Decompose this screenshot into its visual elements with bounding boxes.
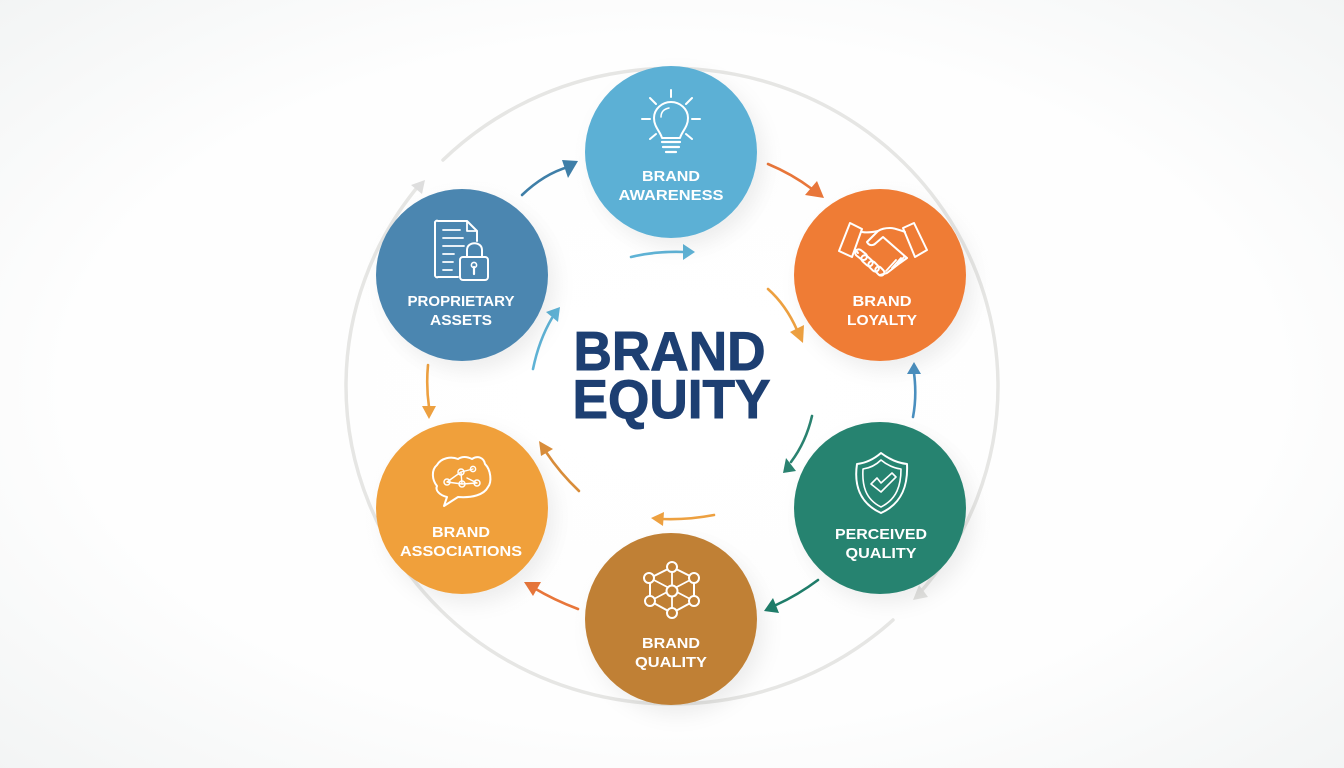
label: proprietary assets: [408, 293, 514, 329]
circle: brand quality: [585, 533, 757, 705]
arrowhead: upper ring arc: [913, 585, 928, 600]
label: brand loyalty: [847, 293, 917, 329]
outer ring: upper arc: [443, 68, 998, 600]
label: proprietary assets: ASSETS: [430, 312, 492, 329]
circle: perceived quality: [794, 422, 966, 594]
arrow: inner to perceived quality: [783, 416, 812, 473]
arrowhead: lower ring arc: [411, 180, 425, 194]
label: brand loyalty: LOYALTY: [847, 312, 917, 329]
circle: brand loyalty: [794, 189, 966, 361]
label: brand awareness: AWARENESS: [618, 187, 724, 204]
title: brand equity: [572, 320, 770, 430]
icon: document with padlock: [435, 221, 488, 280]
label: brand awareness: [618, 168, 724, 204]
label: brand quality: BRAND: [642, 635, 700, 652]
label: perceived quality: QUALITY: [846, 545, 916, 562]
title: brand equity: BRAND: [574, 320, 766, 382]
icon: light bulb: [642, 90, 700, 152]
arrow: proprietary assets to brand awareness: [522, 160, 578, 195]
arrow: perceived quality to brand loyalty: [907, 362, 921, 417]
arrow: inner to brand associations: [539, 441, 579, 491]
arrow: brand awareness to brand loyalty: [768, 164, 824, 198]
circle: brand associations: [376, 422, 548, 594]
icon: shield with check: [856, 453, 907, 513]
label: brand awareness: BRAND: [642, 168, 700, 185]
arrow: inner to right under brand awareness: [631, 244, 695, 260]
arrow: inner to proprietary assets: [533, 307, 560, 369]
outer ring: lower arc: [346, 180, 893, 704]
arrow: proprietary assets to brand associations: [422, 365, 436, 419]
label: brand associations: BRAND: [432, 524, 490, 541]
circle: proprietary assets: [376, 189, 548, 361]
arrow: inner to left: [651, 512, 714, 526]
arrow: perceived quality to brand quality: [764, 580, 818, 613]
label: brand loyalty: BRAND: [852, 293, 912, 310]
label: perceived quality: PERCEIVED: [835, 526, 927, 543]
icon: handshake: [839, 223, 927, 277]
label: perceived quality: [835, 526, 927, 562]
label: proprietary assets: PROPRIETARY: [408, 293, 514, 310]
label: brand associations: ASSOCIATIONS: [400, 543, 522, 560]
icon: molecule network: [644, 562, 699, 618]
circle: brand awareness: [585, 66, 757, 238]
label: brand associations: [400, 524, 522, 560]
arrow: brand quality to brand associations: [524, 582, 578, 609]
arrow: inner to brand loyalty: [768, 289, 804, 343]
label: brand quality: QUALITY: [635, 654, 707, 671]
title: brand equity: EQUITY: [572, 368, 770, 430]
label: brand quality: [635, 635, 707, 671]
icon: speech cloud with network: [433, 457, 490, 506]
